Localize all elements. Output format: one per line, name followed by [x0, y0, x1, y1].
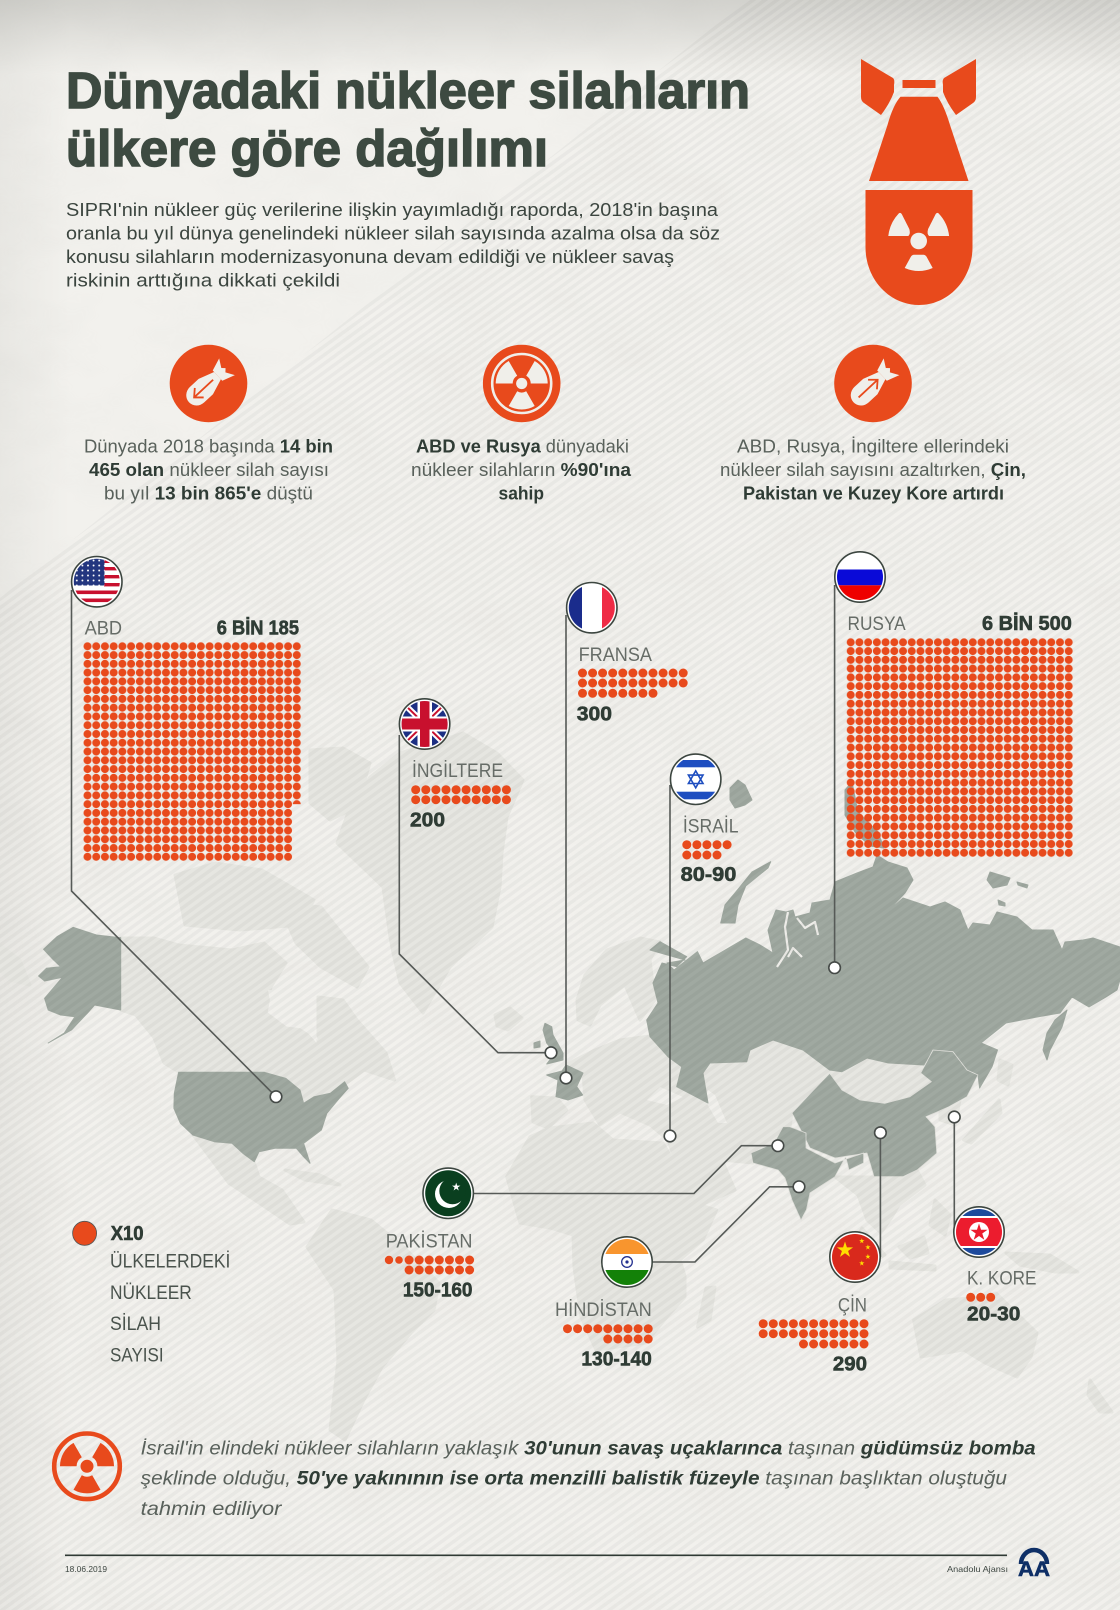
flag: USA	[72, 556, 124, 607]
country: Çin	[759, 1232, 880, 1375]
label: PAKİSTAN	[386, 1231, 472, 1252]
country: İsrail	[670, 754, 739, 886]
map: Alaska	[39, 927, 121, 1043]
label: İNGİLTERE	[412, 761, 503, 782]
fact text: USA and Russia share: nükleer silahların %90'ına	[411, 460, 632, 480]
map: USA mainland	[174, 1072, 348, 1163]
dots	[759, 1319, 868, 1348]
icon: radiation badge	[483, 345, 560, 422]
flag: France	[567, 582, 617, 633]
flag: Israel	[670, 754, 721, 804]
map: Sakhalin and Russian islands	[721, 780, 1067, 1060]
legend dot	[73, 1221, 97, 1245]
value: 20-30	[967, 1304, 1020, 1326]
legend text	[110, 1252, 230, 1366]
icon: large bomb	[861, 59, 976, 305]
value: 130-140	[581, 1349, 652, 1371]
map: cut-outs for seas	[268, 990, 727, 1123]
label: RUSYA	[848, 614, 906, 635]
intro text: SIPRI'nin nükleer güç verilerine ilişkin yayımladığı raporda, 2018'in başına	[66, 199, 719, 220]
note text	[141, 1438, 1036, 1520]
flag: Pakistan	[423, 1168, 473, 1219]
legend multiplier: X10	[111, 1223, 144, 1245]
map: UK	[543, 1023, 563, 1064]
map: China	[792, 1050, 978, 1177]
dots	[411, 785, 511, 804]
fact text: reductions and increases: nükleer silah sayısını azaltırken, Çin,	[720, 460, 1026, 480]
dots	[385, 1256, 474, 1274]
fact text: USA and Russia share: ABD ve Rusya dünyadaki	[416, 437, 629, 457]
value: 6 BİN 185	[217, 617, 299, 640]
flag: North Korea	[954, 1207, 1004, 1257]
map pins	[270, 962, 960, 1193]
value: 300	[577, 703, 612, 725]
value: 200	[410, 810, 445, 832]
country: Rusya	[835, 552, 1073, 857]
date: 18.06.2019	[65, 1564, 107, 1574]
fact text: total count	[84, 437, 333, 504]
flag: UK	[399, 699, 450, 749]
label: ÇİN	[838, 1296, 867, 1317]
label: FRANSA	[579, 645, 652, 666]
legend text: SİLAH	[110, 1314, 161, 1335]
fact text: reductions and increases	[720, 437, 1026, 504]
dot grid	[846, 638, 1073, 857]
value: 290	[833, 1353, 867, 1375]
flag: Russia	[835, 552, 885, 602]
value: 150-160	[403, 1280, 472, 1302]
label: K. KORE	[967, 1269, 1036, 1290]
country: Hindistan	[555, 1237, 653, 1371]
fact text: USA and Russia share: sahip	[498, 484, 544, 504]
source: Anadolu Ajansı	[947, 1564, 1008, 1574]
country: İngiltere	[399, 699, 511, 832]
title: Dünyadaki nükleer silahların	[66, 62, 750, 119]
label: HİNDİSTAN	[555, 1300, 652, 1321]
map: Russia	[647, 855, 1120, 1103]
value: 80-90	[681, 864, 736, 886]
leader lines	[72, 585, 954, 1262]
map: India and Pakistan	[751, 1127, 864, 1220]
intro text: riskinin arttığına dikkati çekildi	[66, 270, 340, 290]
dots	[966, 1293, 995, 1302]
dot grid	[83, 642, 301, 861]
fact text: total count: Dünyada 2018 başında 14 bin	[84, 437, 333, 457]
note text: şeklinde olduğu, 50'ye yakınının ise orta menzilli balistik füzeyle taşınan başlıktan oluştuğu	[141, 1469, 1007, 1490]
footer rule	[65, 1554, 1007, 1556]
dots	[682, 840, 732, 860]
icon: radiation symbol	[54, 1434, 120, 1499]
label: İSRAİL	[683, 816, 739, 837]
icon: bomb with up arrow	[834, 345, 912, 422]
country: Pakistan	[385, 1168, 474, 1302]
dots	[563, 1324, 653, 1344]
logo: Anadolu Ajansı: AA	[1018, 1558, 1050, 1581]
value: 6 BİN 500	[982, 612, 1072, 635]
country: ABD	[72, 556, 301, 861]
fact text: USA and Russia share	[411, 437, 632, 504]
intro text: konusu silahların modernizasyonuna devam edildiği ve nükleer savaş	[66, 246, 674, 267]
map: France	[547, 1065, 583, 1100]
intro text: oranla bu yıl dünya genelindeki nükleer silah sayısında azalma olsa da söz	[66, 222, 720, 244]
label: ABD	[85, 619, 122, 640]
fact text: total count: bu yıl 13 bin 865'e düştü	[104, 484, 313, 504]
legend	[73, 1221, 230, 1366]
dots	[578, 668, 688, 698]
icon: bomb with down arrow	[170, 345, 247, 422]
world map	[0, 733, 1120, 1440]
map: Siberian gulfs	[777, 912, 818, 967]
note text: tahmin ediliyor	[141, 1499, 282, 1520]
intro text	[66, 199, 720, 290]
title: ülkere göre dağılımı	[66, 120, 548, 177]
country: K. Kore	[954, 1207, 1036, 1326]
flag: China	[830, 1232, 880, 1282]
fact text: total count: 465 olan nükleer silah sayısı	[89, 460, 329, 480]
country: Fransa	[567, 582, 688, 725]
legend text: ÜLKELERDEKİ	[110, 1252, 230, 1273]
flag: India	[602, 1237, 652, 1287]
title	[66, 62, 750, 177]
map: light land masses	[0, 733, 1112, 1440]
fact text: reductions and increases: ABD, Rusya, İngiltere ellerindeki	[737, 437, 1009, 457]
legend text: NÜKLEER	[110, 1283, 192, 1304]
note text: İsrail'in elindeki nükleer silahların yaklaşık 30'unun savaş uçaklarınca taşınan güdümsüz bomba	[141, 1438, 1036, 1459]
fact text: reductions and increases: Pakistan ve Kuzey Kore artırdı	[743, 484, 1004, 504]
legend text: SAYISI	[110, 1345, 164, 1366]
